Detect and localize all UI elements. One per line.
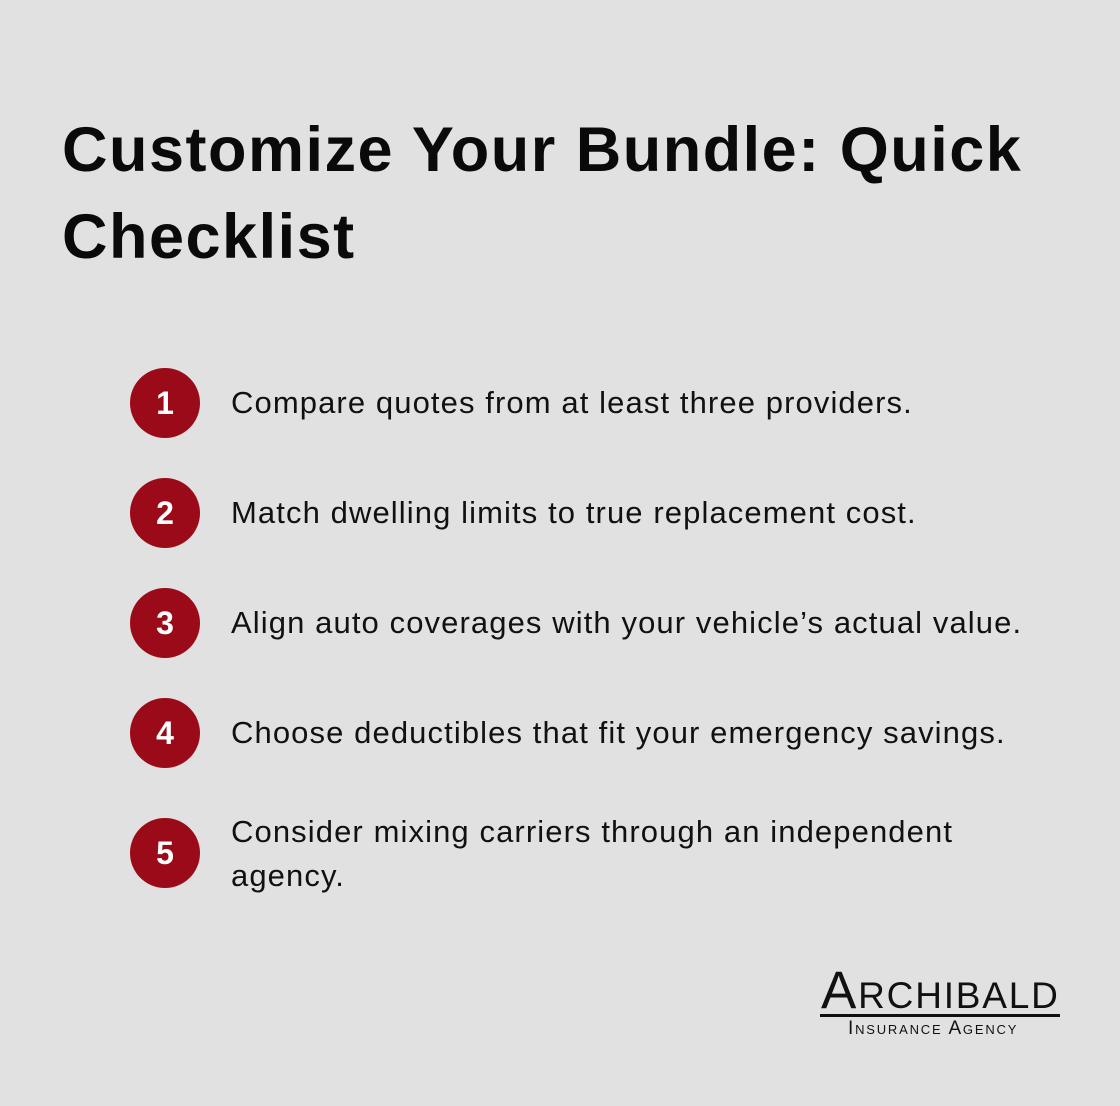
logo: Insurance Agency: [848, 1018, 1018, 1039]
title: Checklist: [62, 202, 356, 272]
item 4: [130, 698, 1006, 768]
title: Customize Your Bundle: Quick: [62, 115, 1022, 185]
item 3: 3: [156, 605, 174, 641]
item 1: [130, 368, 913, 438]
item 5: 5: [156, 835, 174, 871]
item 2: Match dwelling limits to true replacement cost.: [231, 495, 917, 530]
title: [62, 115, 1022, 272]
logo: Archibald: [821, 961, 1060, 1020]
item 3: [130, 588, 1022, 658]
item 5: agency.: [231, 858, 345, 893]
item 2: 2: [156, 495, 174, 531]
item 5: Consider mixing carriers through an independent: [231, 814, 953, 849]
item 4: Choose deductibles that fit your emergency savings.: [231, 715, 1006, 750]
item 3: Align auto coverages with your vehicle’s actual value.: [231, 605, 1022, 640]
item 2: [130, 478, 917, 548]
item 4: 4: [156, 715, 174, 751]
item 5: [130, 814, 953, 893]
item 1: 1: [156, 385, 174, 421]
item 1: Compare quotes from at least three providers.: [231, 385, 913, 420]
